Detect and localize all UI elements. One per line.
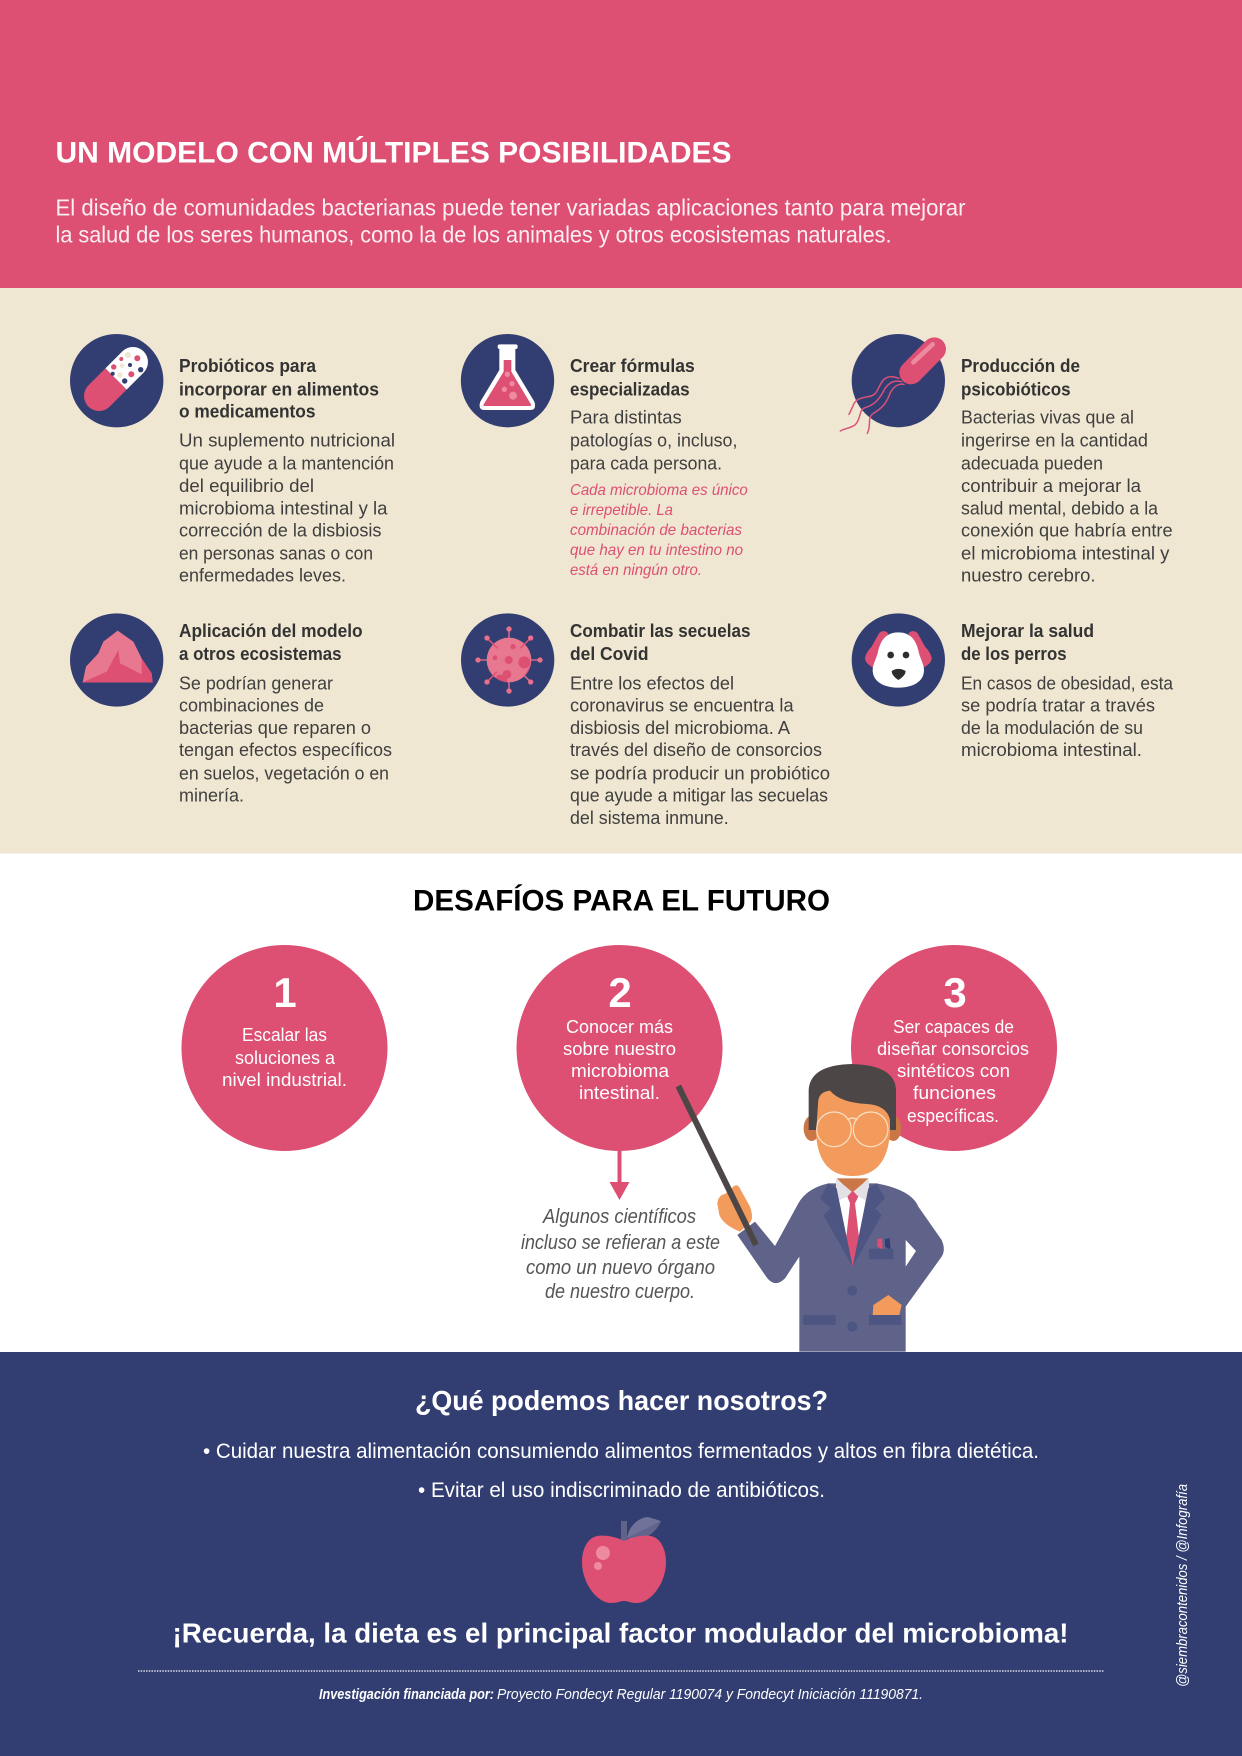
- challenge 2: 2: [608, 969, 632, 1016]
- body text: se podría producir un probiótico: [570, 762, 830, 783]
- icon: bacterium: [840, 334, 945, 433]
- heading: [570, 620, 750, 664]
- intro text: El diseño de comunidades bacterianas puede tener variadas aplicaciones tanto para mejorar: [56, 195, 966, 221]
- challenge 2: intestinal.: [579, 1082, 660, 1103]
- heading: o medicamentos: [179, 401, 316, 422]
- body text: Entre los efectos del: [570, 672, 734, 693]
- heading: desafíos: DESAFÍOS PARA EL FUTURO: [413, 884, 830, 918]
- panel: challenges: [0, 854, 1242, 1352]
- body text: se podría tratar a través: [961, 694, 1155, 716]
- heading: [570, 355, 695, 399]
- bullet list: • Evitar el uso indiscriminado de antibióticos.: [418, 1478, 825, 1502]
- body text: [179, 430, 395, 586]
- intro text: [56, 195, 966, 247]
- note: italic callout: Cada microbioma es único: [570, 482, 748, 499]
- icon: apple: [582, 1517, 666, 1603]
- body text: que ayude a la mantención: [179, 452, 394, 473]
- body text: [179, 672, 392, 806]
- challenge 3: [851, 945, 1057, 1151]
- body text: que ayude a mitigar las secuelas: [570, 784, 828, 806]
- body text: patologías o, incluso,: [570, 430, 737, 450]
- title: UN MODELO CON MÚLTIPLES POSIBILIDADES: [56, 136, 732, 170]
- challenge 3: sintéticos con: [897, 1060, 1010, 1081]
- heading: Mejorar la salud: [961, 620, 1094, 641]
- body text: Se podrían generar: [179, 672, 333, 693]
- note: italic callout: combinación de bacterias: [570, 522, 742, 539]
- heading: del Covid: [570, 643, 648, 664]
- item: psicobióticos: [840, 334, 1173, 586]
- body text: en suelos, vegetación o en: [179, 762, 389, 783]
- bullet list: • Cuidar nuestra alimentación consumiendo alimentos fermentados y altos en fibra dietética.: [203, 1439, 1039, 1463]
- body text: de la modulación de su: [961, 717, 1143, 738]
- icon: dog: [852, 613, 945, 707]
- body text: adecuada pueden: [961, 452, 1103, 473]
- body text: combinaciones de: [179, 694, 324, 716]
- heading: [961, 355, 1080, 399]
- challenge 2: microbioma: [571, 1060, 670, 1081]
- credit: vertical handle: @siembracontenidos / @Infografía: [1175, 1484, 1191, 1687]
- callout: reminder: ¡Recuerda, la dieta es el principal factor modulador del microbioma!: [172, 1618, 1068, 1649]
- body text: para cada persona.: [570, 452, 722, 473]
- heading: Combatir las secuelas: [570, 620, 750, 641]
- heading: [961, 620, 1094, 664]
- challenge 2: sobre nuestro: [563, 1038, 676, 1059]
- item: probióticos: [70, 334, 395, 586]
- body text: [570, 406, 737, 473]
- challenge 3: específicas.: [907, 1105, 999, 1126]
- body text: ingerirse en la cantidad: [961, 430, 1148, 450]
- footer: funding: Investigación financiada por:: [319, 1687, 494, 1703]
- item: covid: [461, 613, 830, 828]
- icon: virus: [461, 613, 554, 707]
- body text: conexión que habría entre: [961, 520, 1173, 540]
- body text: el microbioma intestinal y: [961, 543, 1170, 564]
- body text: enfermedades leves.: [179, 564, 346, 586]
- heading: Probióticos para: [179, 355, 317, 376]
- icon: mountain: [70, 613, 163, 707]
- body text: tengan efectos específicos: [179, 739, 392, 760]
- body text: del equilibrio del: [179, 475, 314, 496]
- body text: bacterias que reparen o: [179, 717, 371, 738]
- body text: nuestro cerebro.: [961, 564, 1096, 586]
- arrow: [610, 1150, 630, 1200]
- footer: funding: [319, 1687, 923, 1703]
- body text: Bacterias vivas que al: [961, 406, 1134, 427]
- bullet list: [203, 1439, 1039, 1502]
- heading: ¿Qué podemos hacer nosotros?: [415, 1385, 828, 1416]
- note: italic text: Algunos científicos: [542, 1206, 696, 1228]
- body text: del sistema inmune.: [570, 807, 729, 828]
- panel: what we can do: [0, 1352, 1242, 1756]
- heading: a otros ecosistemas: [179, 643, 342, 664]
- panel: header: [0, 0, 1242, 288]
- body text: Para distintas: [570, 406, 682, 427]
- icon: capsule: [70, 334, 163, 427]
- challenge 2: Conocer más: [566, 1016, 673, 1037]
- heading: Producción de: [961, 355, 1080, 376]
- item: ecosistemas: [70, 613, 392, 806]
- body text: disbiosis del microbioma. A: [570, 717, 791, 738]
- intro text: la salud de los seres humanos, como la de los animales y otros ecosistemas naturales.: [56, 221, 892, 247]
- note: italic callout: está en ningún otro.: [570, 562, 702, 579]
- note: italic callout: [570, 482, 748, 579]
- body text: corrección de la disbiosis: [179, 520, 382, 540]
- challenge 1: [182, 945, 388, 1151]
- heading: Crear fórmulas: [570, 355, 695, 376]
- item: perros: [852, 613, 1174, 760]
- body text: microbioma intestinal y la: [179, 497, 388, 518]
- body text: [961, 406, 1173, 586]
- challenge 2: [516, 945, 722, 1151]
- item: fórmulas: [461, 334, 748, 579]
- panel: applications: [0, 288, 1242, 854]
- note: italic text: como un nuevo órgano: [526, 1257, 715, 1279]
- heading: de los perros: [961, 643, 1067, 664]
- heading: psicobióticos: [961, 378, 1071, 399]
- challenge 1: 1: [273, 969, 297, 1016]
- challenge 1: Escalar las: [242, 1024, 327, 1045]
- challenge 1: nivel industrial.: [222, 1069, 347, 1090]
- body text: En casos de obesidad, esta: [961, 672, 1174, 693]
- challenge 3: Ser capaces de: [893, 1016, 1014, 1037]
- body text: través del diseño de consorcios: [570, 739, 822, 760]
- body text: [570, 672, 830, 828]
- note: italic text: [521, 1206, 720, 1303]
- note: italic text: incluso se refieran a este: [521, 1232, 720, 1254]
- challenge 3: diseñar consorcios: [877, 1038, 1029, 1059]
- body text: contribuir a mejorar la: [961, 475, 1142, 496]
- note: italic text: de nuestro cuerpo.: [545, 1281, 695, 1303]
- illustration: scientist: [678, 1064, 944, 1352]
- heading: incorporar en alimentos: [179, 378, 379, 399]
- note: italic callout: que hay en tu intestino no: [570, 542, 743, 559]
- body text: [961, 672, 1174, 760]
- challenge 3: funciones: [913, 1082, 996, 1103]
- body text: microbioma intestinal.: [961, 739, 1142, 760]
- body text: coronavirus se encuentra la: [570, 694, 794, 716]
- icon: flask: [461, 334, 554, 427]
- body text: minería.: [179, 784, 244, 806]
- footer: funding: Proyecto Fondecyt Regular 1190074 y Fondecyt Iniciación 11190871.: [497, 1687, 923, 1703]
- body text: en personas sanas o con: [179, 543, 373, 564]
- heading: [179, 620, 363, 664]
- heading: [179, 355, 379, 422]
- body text: salud mental, debido a la: [961, 497, 1159, 518]
- challenge 3: 3: [943, 969, 967, 1016]
- heading: especializadas: [570, 378, 690, 399]
- challenge 1: soluciones a: [235, 1047, 336, 1068]
- heading: Aplicación del modelo: [179, 620, 363, 641]
- body text: Un suplemento nutricional: [179, 430, 395, 450]
- note: italic callout: e irrepetible. La: [570, 502, 673, 519]
